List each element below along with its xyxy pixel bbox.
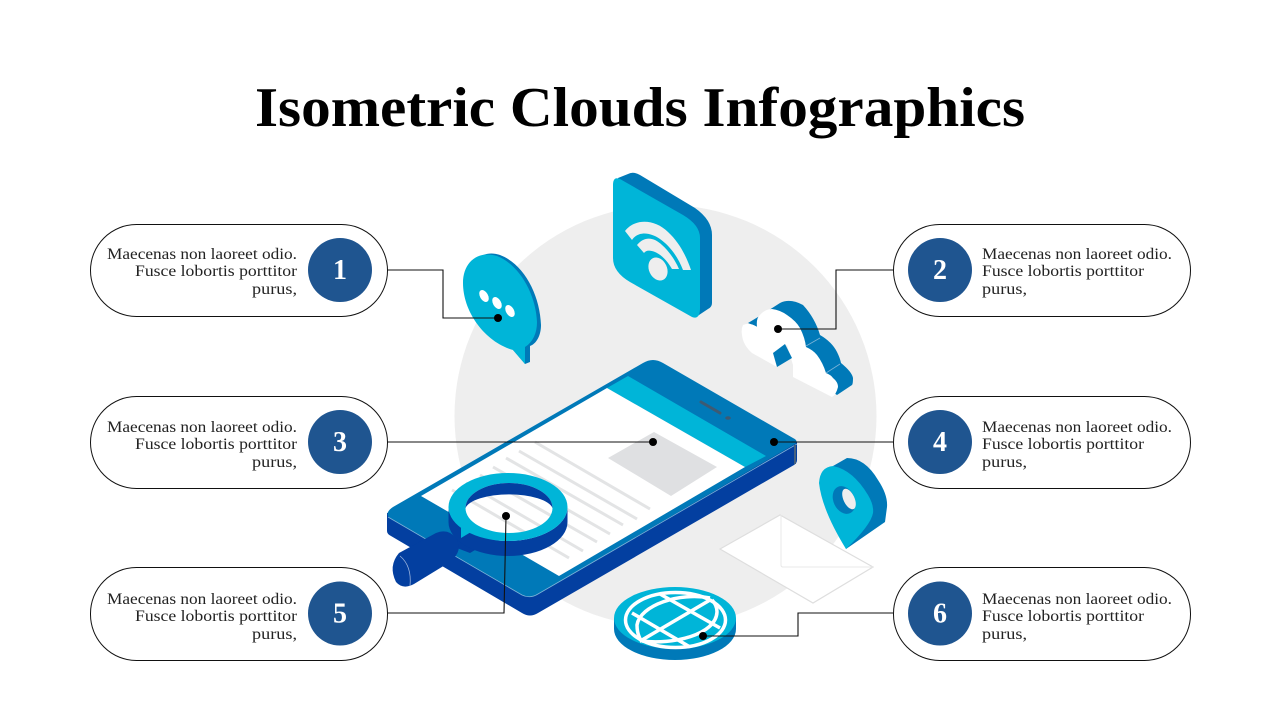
- text lines on screen: [452, 442, 650, 558]
- icon: smartphone: [387, 360, 797, 616]
- badge 1: 1: [333, 255, 347, 286]
- callout 1: [90, 224, 388, 316]
- callout 1 text: Fusce lobortis porttitor: [135, 263, 298, 280]
- callout 2: [894, 224, 1190, 316]
- callout 2 text: Fusce lobortis porttitor: [982, 263, 1145, 280]
- badge 4: 4: [933, 427, 947, 458]
- icon: globe coin: [614, 587, 736, 660]
- callout 2 text: Maecenas non laoreet odio.: [982, 246, 1172, 263]
- badge 2: 2: [933, 255, 947, 286]
- callout 6 text: Fusce lobortis porttitor: [982, 608, 1145, 625]
- badge 2: [908, 238, 972, 302]
- handle: [393, 531, 459, 587]
- typing dots: [477, 288, 517, 319]
- callout 4 text: Fusce lobortis porttitor: [982, 436, 1145, 453]
- callout 6: [894, 568, 1190, 660]
- connector 5: [387, 512, 510, 613]
- handle neck: [449, 528, 492, 553]
- lens inner wall: [466, 483, 552, 508]
- callout 5: [90, 568, 388, 660]
- title: Isometric Clouds Infographics: [255, 77, 1025, 139]
- cyan header band: [607, 376, 766, 467]
- callout 1 text: purus,: [252, 281, 297, 298]
- badge 3: 3: [333, 427, 347, 458]
- lens ring: [448, 473, 568, 541]
- callout 4 text: Maecenas non laoreet odio.: [982, 419, 1172, 436]
- callout 1 text: Maecenas non laoreet odio.: [107, 246, 297, 263]
- callout 5 text: purus,: [252, 626, 297, 643]
- callout 3 text: purus,: [252, 454, 297, 471]
- badge 4: [908, 410, 972, 474]
- icon: location pin: [819, 458, 887, 549]
- callout 3 text: Maecenas non laoreet odio.: [107, 419, 297, 436]
- connector 3: [387, 438, 657, 446]
- connector 2: [774, 270, 893, 333]
- callout 4 text: purus,: [982, 454, 1027, 471]
- callout 2 text: purus,: [982, 281, 1027, 298]
- icon: chat bubble: [463, 254, 541, 364]
- wifi symbol: [625, 222, 691, 284]
- badge 5: [308, 582, 372, 646]
- badge 5: 5: [333, 598, 347, 630]
- lens rim depth: [448, 507, 568, 556]
- callout 5 text: Maecenas non laoreet odio.: [107, 591, 297, 608]
- badge 6: 6: [933, 598, 947, 630]
- background circle: [454, 205, 876, 627]
- callout 6 text: purus,: [982, 626, 1027, 643]
- phone top surface: [388, 360, 797, 597]
- badge 3: [308, 410, 372, 474]
- badge 1: [308, 238, 372, 302]
- screen: [421, 388, 745, 576]
- callout 3 text: Fusce lobortis porttitor: [135, 436, 298, 453]
- icon: envelope: [720, 515, 873, 603]
- callout 5 text: Fusce lobortis porttitor: [135, 608, 298, 625]
- phone side: [387, 442, 797, 616]
- icon: magnifying glass: [393, 473, 568, 587]
- connector 4: [770, 438, 893, 446]
- globe grid: [626, 592, 726, 648]
- callout 6 text: Maecenas non laoreet odio.: [982, 591, 1172, 608]
- icon: wifi tile: [613, 173, 712, 318]
- callout 3: [90, 396, 388, 488]
- callout 4: [894, 396, 1190, 488]
- speaker and camera: [701, 402, 720, 413]
- connector 6: [699, 613, 893, 640]
- image placeholder: [608, 432, 717, 496]
- connector 1: [387, 270, 502, 322]
- badge 6: [908, 582, 972, 646]
- icon: cloud: [742, 301, 853, 397]
